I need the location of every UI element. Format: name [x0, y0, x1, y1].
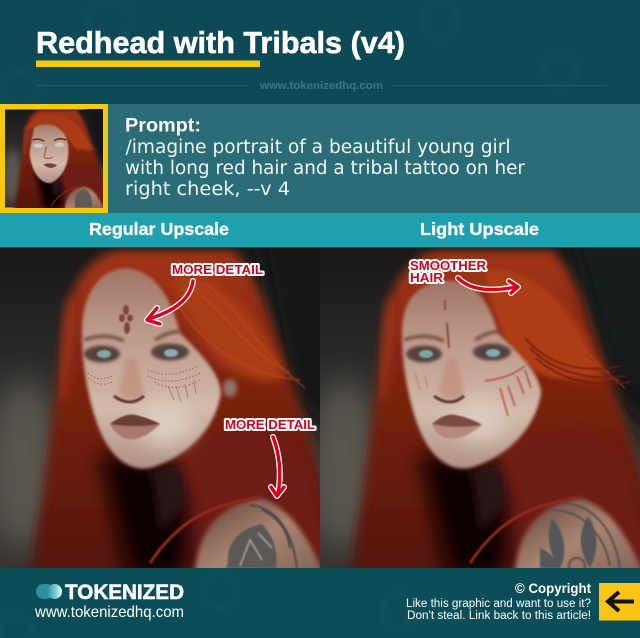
nose — [118, 358, 145, 400]
callout: smoother hair: HAIR — [410, 270, 444, 285]
arrow — [458, 278, 518, 293]
brows and eyes — [84, 332, 189, 362]
prompt text: with long red hair and a tribal tattoo on her — [125, 158, 525, 179]
panel: prompt — [0, 104, 640, 213]
lips — [110, 415, 160, 439]
source url with rules: www.tokenizedhq.com — [259, 80, 383, 92]
prompt text: /imagine portrait of a beautiful young girl — [126, 137, 510, 158]
arrow — [147, 281, 193, 324]
forehead mark — [119, 305, 133, 334]
shoulder tattoo — [226, 505, 297, 568]
forehead mark — [445, 300, 449, 348]
band: column headings — [0, 213, 640, 247]
copyright note — [406, 580, 591, 622]
image: regular upscale portrait — [0, 248, 320, 568]
copyright note: Don't steal. Link back to this article! — [407, 610, 591, 622]
image: light upscale portrait — [320, 248, 640, 568]
callout: more detail shoulder — [225, 417, 315, 496]
thumbnail portrait — [0, 91, 128, 214]
icon: back arrow — [599, 583, 640, 620]
prompt text: Prompt: — [125, 116, 201, 136]
lips — [432, 415, 482, 439]
website: www.tokenizedhq.com — [34, 604, 184, 621]
freckle tattoo — [88, 366, 202, 402]
brows and eyes — [404, 332, 511, 362]
shoulder tattoo — [540, 503, 620, 574]
face — [82, 268, 221, 469]
callout: more detail forehead — [147, 262, 263, 324]
copyright note: © Copyright — [515, 580, 591, 596]
callout: smoother hair — [410, 258, 518, 293]
nose — [438, 358, 465, 400]
header background — [0, 0, 640, 104]
callout: more detail shoulder: MORE DETAIL — [225, 417, 315, 432]
callout: smoother hair: SMOOTHER — [410, 258, 487, 273]
arrow — [271, 437, 284, 496]
logo: TOKENIZED — [65, 581, 184, 604]
prompt text: right cheek, --v 4 — [125, 179, 290, 200]
red cheek tattoo — [415, 366, 531, 416]
ear — [223, 379, 237, 397]
heading: light upscale: Light Upscale — [420, 219, 539, 239]
copyright note: Like this graphic and want to use it? — [406, 598, 591, 610]
title: Redhead with Tribals (v4) — [36, 25, 405, 60]
title underline — [36, 60, 260, 67]
callout: more detail forehead: MORE DETAIL — [172, 262, 263, 277]
heading: regular upscale: Regular Upscale — [89, 219, 229, 239]
footer — [0, 568, 640, 638]
prompt text — [125, 116, 525, 200]
face — [402, 281, 541, 469]
